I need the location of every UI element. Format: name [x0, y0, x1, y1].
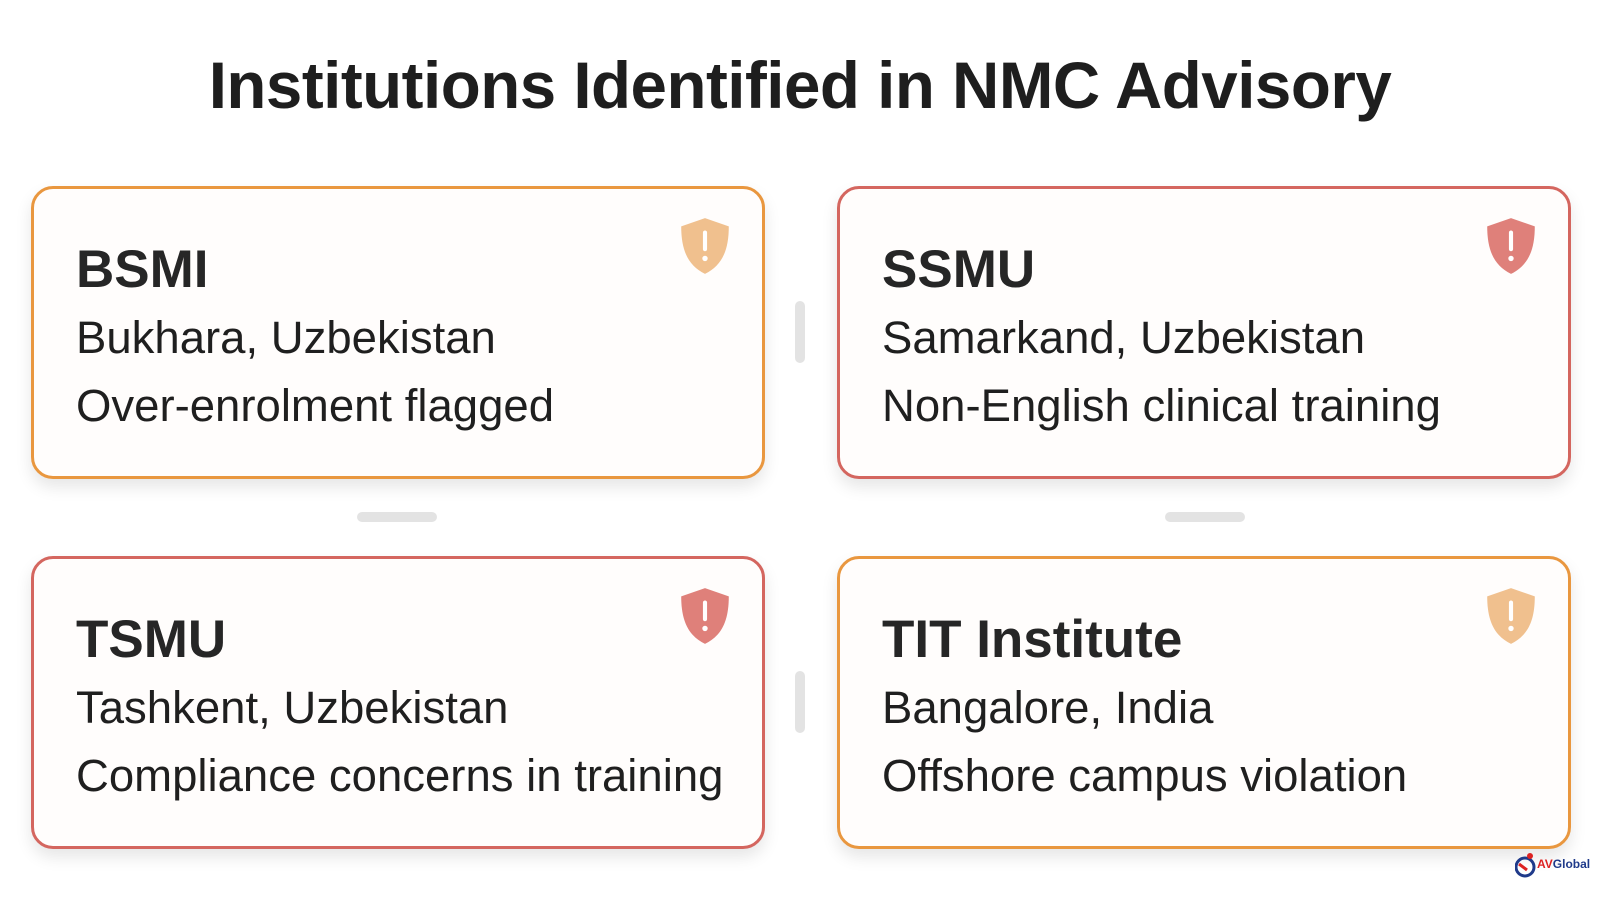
connector: top vertical: [795, 301, 805, 363]
panel: TSMU: [31, 556, 765, 849]
text: location: Bukhara, Uzbekistan: [76, 312, 496, 363]
text: issue: Offshore campus violation: [882, 750, 1407, 801]
connector: left horizontal: [357, 512, 437, 522]
icon: shield: [681, 218, 729, 274]
connector: bottom vertical: [795, 671, 805, 733]
text: issue: Non-English clinical training: [882, 380, 1441, 431]
heading: SSMU: SSMU: [882, 240, 1035, 299]
heading: BSMI: BSMI: [76, 240, 208, 299]
heading: TIT Institute: TIT Institute: [882, 610, 1182, 669]
logo: AVGlobal: [1537, 857, 1590, 871]
heading: TSMU: TSMU: [76, 610, 226, 669]
panel: SSMU: [837, 186, 1571, 479]
panel: BSMI: [31, 186, 765, 479]
text: issue: Over-enrolment flagged: [76, 380, 554, 431]
text: issue: Compliance concerns in training: [76, 750, 723, 801]
text: location: Bangalore, India: [882, 682, 1213, 733]
text: location: Samarkand, Uzbekistan: [882, 312, 1365, 363]
connector: right horizontal: [1165, 512, 1245, 522]
logo: [1515, 853, 1590, 878]
title: Institutions Identified in NMC Advisory: [209, 49, 1391, 122]
icon: shield: [681, 588, 729, 644]
icon: shield: [1487, 218, 1535, 274]
icon: shield: [1487, 588, 1535, 644]
text: location: Tashkent, Uzbekistan: [76, 682, 508, 733]
panel: TIT Institute: [837, 556, 1571, 849]
